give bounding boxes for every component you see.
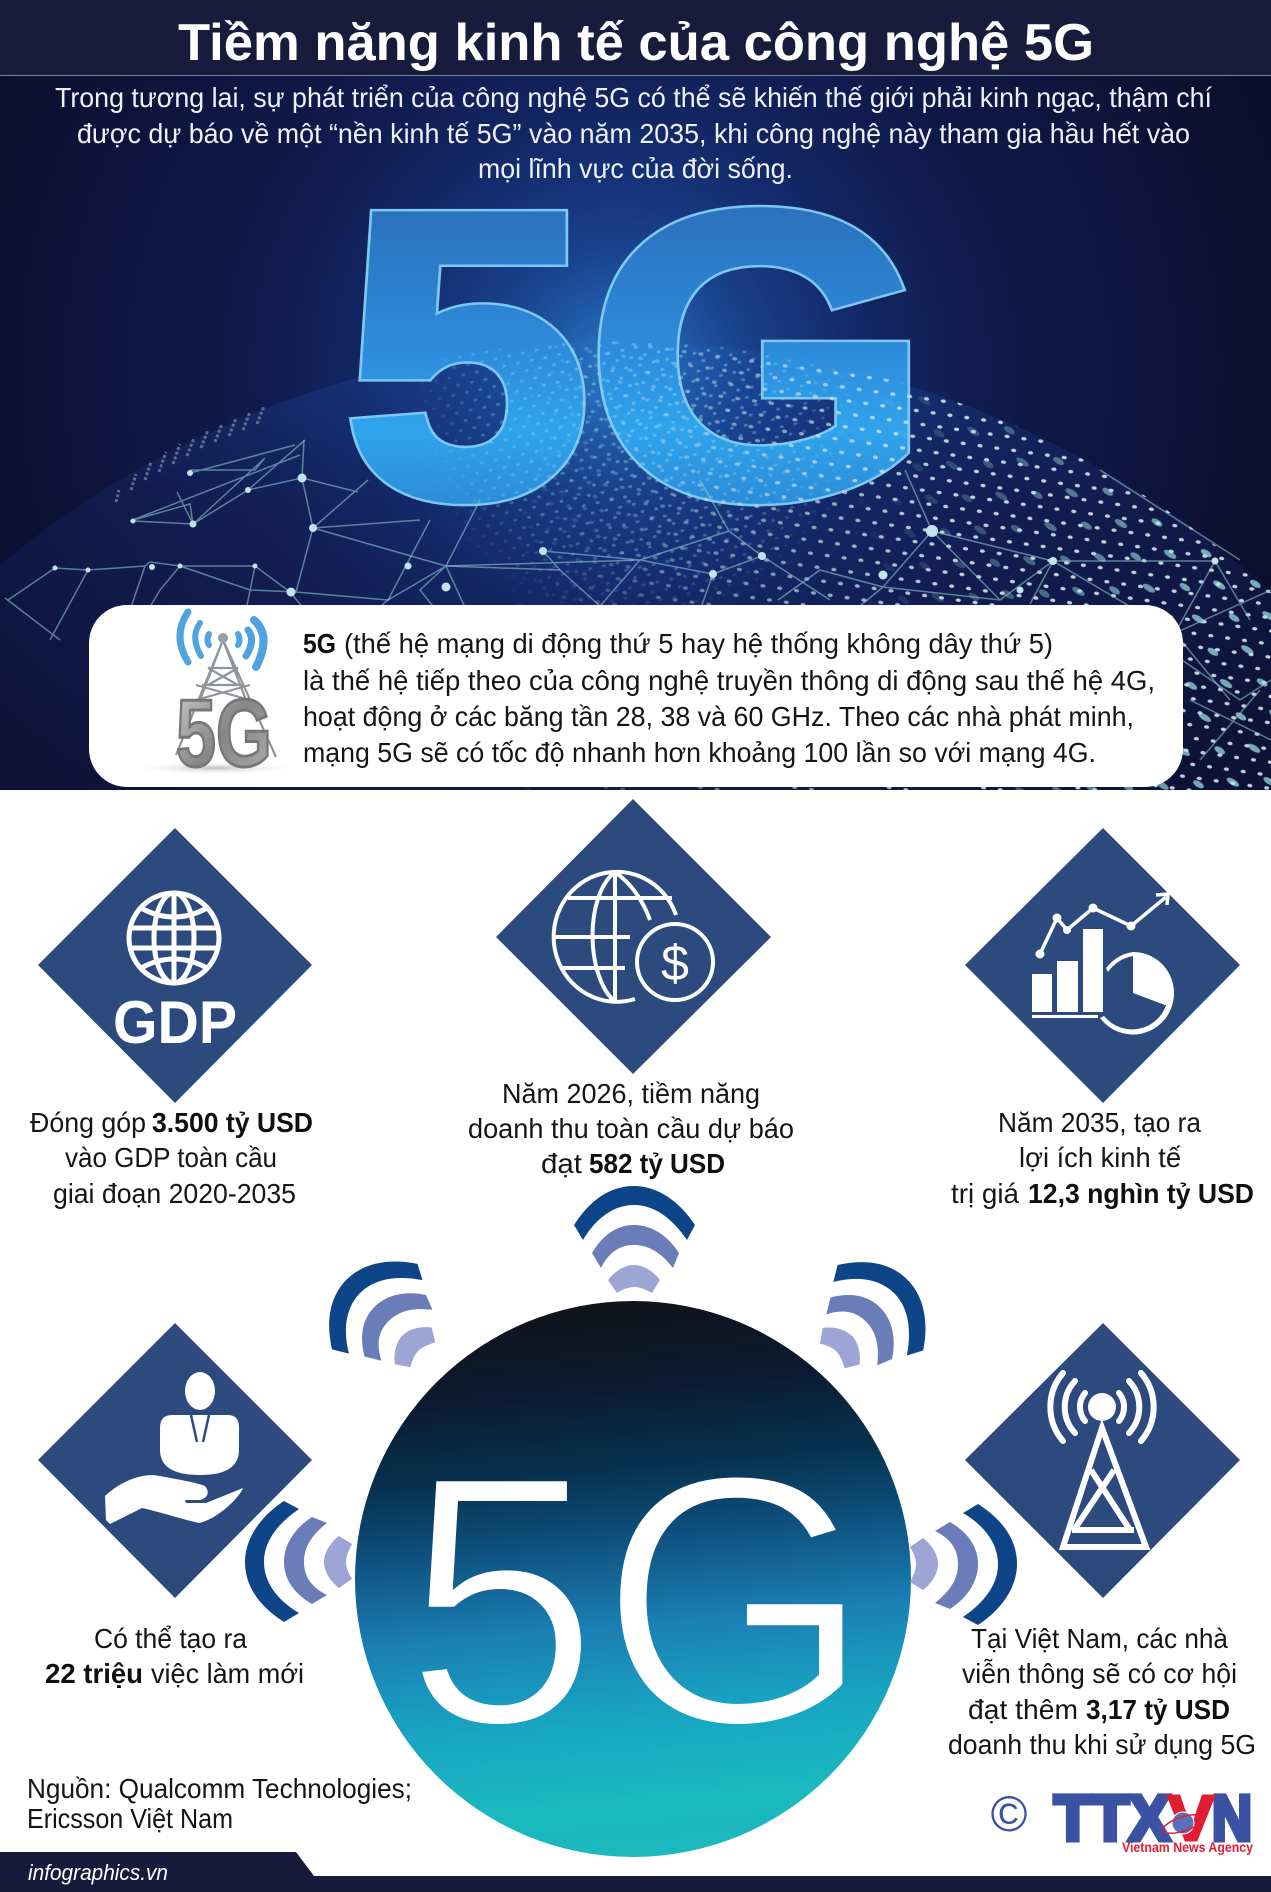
caption: Vietnam telecom xyxy=(948,1623,1256,1760)
card text: hoạt động ở các băng tần 28, 38 và 60 GHz. Theo các nhà phát minh, xyxy=(303,701,1134,732)
logo: TTXVN: N xyxy=(1212,1782,1252,1854)
logo: TTXVN: Vietnam News Agency xyxy=(1122,1839,1253,1855)
icon: 5G antenna tower xyxy=(130,612,300,787)
intro text block: Trong tương lai, sự phát triển của công nghệ 5G có thể sẽ khiến thế giới phải kinh ngạc, thậm chí xyxy=(55,82,1212,113)
hero graphic: network lines xyxy=(5,440,1271,760)
hero graphic: network nodes xyxy=(52,470,1218,596)
icon: 5G antenna tower: 5G xyxy=(176,680,272,787)
central 5G circle: 5G xyxy=(404,1400,872,1800)
diamond: revenue xyxy=(496,799,771,1074)
caption: global revenue: doanh thu toàn cầu dự báo xyxy=(468,1113,794,1144)
source note: Nguồn: Qualcomm Technologies; xyxy=(27,1773,412,1804)
caption: global revenue: Năm 2026, tiềm năng xyxy=(502,1078,760,1109)
panel: Vietnam telecom xyxy=(965,1323,1240,1598)
caption: jobs: Có thể tạo ra xyxy=(94,1623,247,1654)
icon: radio tower xyxy=(1050,1373,1154,1547)
card text: 5G xyxy=(303,628,336,659)
caption: jobs: việc làm mới xyxy=(151,1658,304,1689)
card text xyxy=(303,628,1155,768)
caption: economic benefit: lợi ích kinh tế xyxy=(1019,1142,1181,1173)
diamond: telecom xyxy=(965,1323,1240,1598)
hero panel: 5G globe image xyxy=(0,75,1271,790)
caption: jobs xyxy=(45,1623,304,1689)
diamond: benefit xyxy=(965,828,1240,1103)
hero graphic: large 5G lettering: 5G xyxy=(346,131,928,580)
footer bar xyxy=(0,1852,1271,1892)
copyright symbol: © xyxy=(991,1786,1028,1842)
caption: economic benefit xyxy=(951,1107,1254,1209)
icon label: GDP: GDP xyxy=(113,989,237,1056)
caption: GDP xyxy=(30,1107,313,1209)
caption: Vietnam telecom: doanh thu khi sử dụng 5G xyxy=(948,1729,1256,1760)
hero graphic: large 5G lettering xyxy=(348,204,910,506)
panel: GDP xyxy=(38,828,312,1103)
caption: global revenue xyxy=(468,1078,794,1179)
caption: GDP: vào GDP toàn cầu xyxy=(65,1142,277,1173)
caption: global revenue: 582 tỷ USD xyxy=(589,1148,725,1179)
card text: (thế hệ mạng di động thứ 5 hay hệ thống không dây thứ 5) xyxy=(344,628,1053,659)
title: Tiềm năng kinh tế của công nghệ 5G xyxy=(178,14,1094,72)
intro text block: mọi lĩnh vực của đời sống. xyxy=(478,153,793,184)
title band xyxy=(0,0,1271,76)
signal waves: upper right xyxy=(790,1237,951,1399)
caption: GDP: 3.500 tỷ USD xyxy=(152,1107,313,1138)
caption: GDP: Đóng góp xyxy=(30,1107,146,1138)
card text: là thế hệ tiếp theo của công nghệ truyền thông di động sau thế hệ 4G, xyxy=(303,665,1155,696)
caption: economic benefit: trị giá xyxy=(951,1178,1019,1209)
diamond: jobs xyxy=(38,1323,312,1598)
icon: globe with dollar coin xyxy=(553,872,713,1002)
signal waves: upper left xyxy=(304,1236,466,1397)
signal waves: right xyxy=(910,1504,1017,1625)
caption: Vietnam telecom: Tại Việt Nam, các nhà xyxy=(971,1623,1228,1654)
signal waves: top xyxy=(574,1186,695,1293)
caption: Vietnam telecom: 3,17 tỷ USD xyxy=(1086,1694,1230,1725)
signal waves: left xyxy=(245,1501,352,1622)
source note xyxy=(27,1773,412,1834)
caption: Vietnam telecom: đạt thêm xyxy=(968,1694,1078,1725)
caption: economic benefit: 12,3 nghìn tỷ USD xyxy=(1028,1178,1254,1209)
icon: person in hand xyxy=(105,1372,243,1524)
source note: Ericsson Việt Nam xyxy=(27,1803,233,1834)
caption: jobs: 22 triệu xyxy=(45,1658,143,1689)
hero graphic: left dash marks xyxy=(116,406,264,502)
logo: TTXVN: V xyxy=(1168,1782,1214,1854)
hero graphic: large 5G lettering: 5G xyxy=(346,131,928,580)
panel: global revenue xyxy=(496,799,771,1074)
caption: GDP: giai đoạn 2020-2035 xyxy=(53,1178,296,1209)
diamond: GDP xyxy=(38,828,312,1103)
caption: economic benefit: Năm 2035, tạo ra xyxy=(998,1107,1201,1138)
info card xyxy=(89,605,1183,787)
footer site name: infographics.vn xyxy=(28,1860,168,1885)
icon: globe xyxy=(129,893,219,983)
icon: charts xyxy=(1032,929,1174,1035)
logo: TTXVN: TTX xyxy=(1054,1782,1170,1854)
card text: mạng 5G sẽ có tốc độ nhanh hơn khoảng 100 lần so với mạng 4G. xyxy=(303,737,1096,768)
panel: jobs xyxy=(38,1323,312,1598)
panel: economic benefit xyxy=(965,828,1240,1103)
intro text block xyxy=(55,82,1212,184)
central 5G circle xyxy=(355,1301,911,1857)
logo: TTXVN xyxy=(1054,1782,1253,1855)
icon: dollar sign: $ xyxy=(661,935,689,991)
caption: global revenue: đạt xyxy=(541,1148,582,1179)
intro text block: được dự báo về một “nền kinh tế 5G” vào năm 2035, khi công nghệ này tham gia hầu hết vào xyxy=(77,118,1190,149)
caption: Vietnam telecom: viễn thông sẽ có cơ hội xyxy=(962,1658,1237,1689)
